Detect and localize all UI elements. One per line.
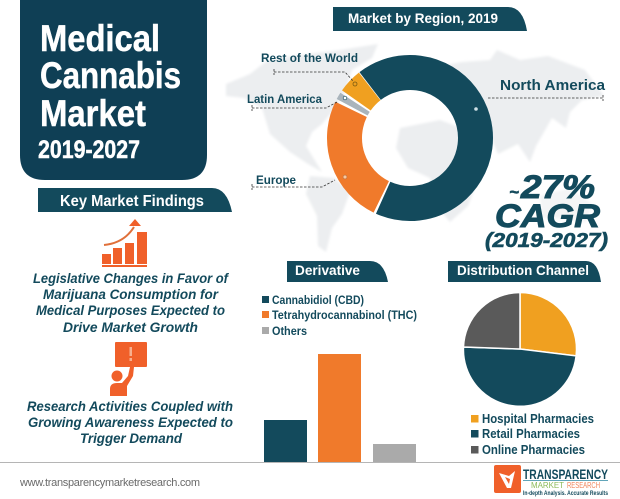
label: rest of the world [261,51,358,86]
finding 1 text: Drive Market Growth [63,319,198,335]
logo: transparency market research [494,465,609,497]
logo: transparency market research: RESEARCH [567,481,600,490]
label: europe: Europe [256,173,296,187]
legend: derivative: Others [272,324,307,338]
legend: derivative: Tetrahydrocannabinol (THC) [272,308,417,322]
label: latin america [247,92,347,111]
callout: CAGR: ~ [509,182,519,202]
icon: rising bar chart [102,219,147,267]
finding 1 text: Legislative Changes in Favor of [33,270,229,286]
world map background [226,44,604,252]
finding 1 text [33,270,229,335]
finding 2 text: Growing Awareness Expected to [28,414,233,430]
finding 1 text: Marijuana Consumption for [43,286,219,302]
heading: derivative [287,261,388,282]
heading: market by region [333,7,527,31]
title panel: Cannabis [40,55,181,96]
title panel: Medical [40,18,160,59]
legend: distribution channel: Retail Pharmacies [482,426,580,441]
title panel: 2019-2027 [38,136,140,164]
finding 2 text [27,398,233,446]
legend: distribution channel [471,411,594,457]
label: rest of the world: Rest of the World [261,51,358,65]
label: europe [252,173,347,190]
website url: www.transparencymarketresearch.com [19,477,200,489]
title panel: Market [40,93,146,134]
heading: market by region: Market by Region, 2019 [348,10,498,26]
finding 2 text: Research Activities Coupled with [27,398,233,414]
callout: CAGR [485,169,608,252]
heading: derivative: Derivative [295,262,360,278]
bar chart: derivative [264,354,416,462]
donut chart: market by region [318,46,502,230]
heading: key market findings: Key Market Findings [60,193,204,210]
icon: person holding alert sign [110,342,147,396]
callout: CAGR: 27% [520,169,595,205]
legend: derivative: Cannabidiol (CBD) [272,293,364,307]
legend: derivative [262,293,417,338]
label: north america: North America [500,77,606,94]
callout: CAGR: (2019-2027) [485,230,608,252]
label: latin america: Latin America [247,92,322,106]
legend: distribution channel: Online Pharmacies [482,442,585,457]
label: north america [474,77,606,111]
heading: distribution channel: Distribution Channel [457,262,589,278]
title panel [20,0,207,180]
pie chart: distribution channel [463,292,577,406]
logo: transparency market research: MARKET [531,481,564,490]
finding 2 text: Trigger Demand [80,430,182,446]
legend: distribution channel: Hospital Pharmacies [482,411,594,426]
heading: distribution channel [448,261,601,282]
heading: key market findings [38,188,232,212]
finding 1 text: Medical Purposes Expected to [36,302,225,318]
callout: CAGR: CAGR [495,198,600,234]
